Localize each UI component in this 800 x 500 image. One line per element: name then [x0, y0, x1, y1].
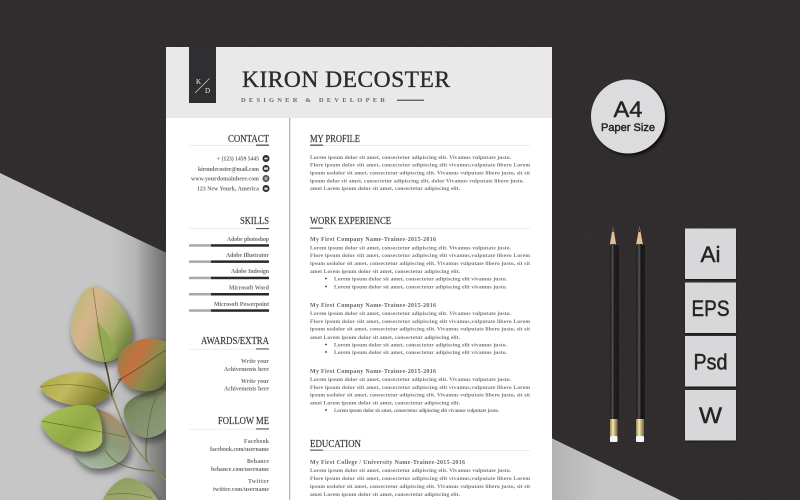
- section: skills: Microsoft Powerpoint: [214, 302, 269, 308]
- section: follow me: Facebook: [244, 439, 270, 445]
- section: my profile: ipsum usdolor sit amet, consectetur adipiscing elit. Vivamus vulputate libero justo, sit sit: [310, 170, 530, 176]
- section: contact: CONTACT: [228, 134, 269, 145]
- section: my profile: MY PROFILE: [310, 134, 360, 145]
- badge: Psd: Psd: [694, 350, 728, 374]
- job entry 3: ipsum usdolor sit amet, consectetur adipiscing elit. Vivamus vulputate libero justo, sit sit: [310, 392, 530, 398]
- job entry 2: Lorem ipsum dolor sit amet, consectetur adipiscing elit vivamus justo.: [334, 350, 508, 356]
- light gray diagonal background: [0, 173, 680, 500]
- job entry 3: amet Lorem ipsum dolor sit amet, consectetur adipiscing elit.: [310, 400, 461, 406]
- leaf A: [71, 286, 132, 362]
- section: education: [310, 439, 530, 498]
- job entry 3: Lorem ipsum dolor sit amet, consectetur adipiscing elit. Vivamus vulputate justo.: [310, 377, 512, 383]
- section: skills: Microsoft Word: [229, 286, 270, 292]
- resume paper: [166, 47, 552, 500]
- section: skills: Adobe photoshop: [227, 237, 269, 243]
- section: my profile: amet Lorem ipsum dolor sit amet, consectetur adipiscing elit.: [310, 186, 461, 192]
- job entry 3: Lorem ipsum dolor sit amet, consectetur adipiscing elit vivamus vulputate justo.: [334, 409, 500, 414]
- job entry 2: ipsum usdolor sit amet, consectetur adipiscing elit. Vivamus vulputate libero justo, sit sit: [310, 326, 530, 332]
- section: awards: Write your: [241, 359, 269, 365]
- section: follow me: behance.com/username: [211, 467, 269, 473]
- section: follow me: Twitter: [248, 479, 269, 485]
- botanical leaves: [40, 286, 166, 500]
- job entry 2: Flore ipsum dolor siit amet, consectetur adipiscing elit vivamus,vulputate libero Lorem: [310, 319, 530, 325]
- section: awards: [189, 336, 270, 392]
- job entry 1: amet Lorem ipsum dolor sit amet, consectetur adipiscing elit.: [310, 269, 461, 275]
- section: education: amet Lorem ipsum dolor sit amet, consectetur adipiscing elit.: [310, 492, 461, 498]
- section: contact: kirondecoster@mail.com: [198, 167, 259, 173]
- leaf B: [118, 339, 166, 391]
- job entry 3: My First Company Name-Trainee-2015-2016: [310, 369, 436, 375]
- leaf A centre patch: [97, 322, 117, 361]
- badge: A4 paper size: Paper Size: [601, 122, 655, 134]
- job entry 2: Lorem ipsum dolor sit amet, consectetur adipiscing elit vivamus justo.: [334, 342, 508, 348]
- leaf E: [41, 405, 102, 452]
- job subtitle: DESIGNER & DEVELOPER: [241, 97, 385, 104]
- badge: EPS: EPS: [692, 296, 730, 321]
- job entry 2: Lorem ipsum dolor sit amet, consectetur adipiscing elit. Vivamus vulputate justo.: [310, 311, 512, 317]
- job entry 2: [310, 303, 530, 356]
- pencil 2: [636, 226, 645, 442]
- badge: A4 paper size: A4: [614, 97, 642, 122]
- leaf stems: [105, 362, 166, 480]
- leaf C: [40, 372, 110, 407]
- header band: [166, 47, 552, 118]
- badge: A4 paper size: [591, 80, 665, 154]
- section: education: My First College / University Name-Trainee-2015-2016: [310, 460, 465, 466]
- section: contact: 123 New Yourk, America: [197, 186, 259, 192]
- job entry 2: My First Company Name-Trainee-2015-2016: [310, 303, 436, 309]
- section: education: Lorem ipsum dolor sit amet, consectetur adipiscing elit. Vivamus vulputate justo.: [310, 468, 512, 474]
- monogram tab: [189, 47, 216, 103]
- column divider: [289, 118, 290, 500]
- job entry 3: [310, 369, 530, 414]
- job entry 1: [310, 237, 530, 290]
- badge: Psd: [685, 336, 736, 386]
- section: follow me: facebook.com/username: [210, 447, 269, 453]
- badge: Ai: [685, 228, 736, 279]
- badge: W: W: [699, 403, 722, 428]
- job entry 1: Lorem ipsum dolor sit amet, consectetur adipiscing elit vivamus justo.: [334, 284, 508, 290]
- section: work experience: WORK EXPERIENCE: [310, 216, 391, 227]
- section: my profile: ipsum dolor sit amet, consectetur adipiscing elit, dolor Vivamus vulputate libero justo.: [310, 178, 525, 184]
- job entry 1: Flore ipsum dolor siit amet, consectetur adipiscing elit vivamus,vulputate libero Lorem: [310, 253, 530, 259]
- section: my profile: Flore ipsum dolor siit amet, consectetur adipiscing elit vivamus,vulputate libero Lorem: [310, 162, 530, 168]
- section: my profile: Lorem ipsum dolor sit amet, consectetur adipiscing elit. Vivamus vulputate justo.: [310, 155, 512, 161]
- section: education: Flore ipsum dolor siit amet, consectetur adipiscing elit vivamus,vulputate libero Lorem: [310, 476, 530, 482]
- contact icons: [262, 155, 270, 192]
- section: contact: www.yourdomainhere.com: [191, 176, 259, 182]
- section: awards: Achivements here: [224, 367, 269, 373]
- job entry 1: ipsum usdolor sit amet, consectetur adipiscing elit. Vivamus vulputate libero justo, sit sit: [310, 261, 530, 267]
- section: work experience: [310, 216, 530, 414]
- monogram tab: K: [196, 78, 201, 86]
- section: awards: AWARDS/EXTRA: [201, 336, 270, 347]
- section: contact: [189, 134, 270, 192]
- job entry 2: amet Lorem ipsum dolor sit amet, consectetur adipiscing elit.: [310, 335, 461, 341]
- monogram tab: D: [205, 87, 210, 95]
- leaf G: [103, 478, 158, 500]
- job entry 3: Flore ipsum dolor siit amet, consectetur adipiscing elit vivamus,vulputate libero Lorem: [310, 385, 530, 391]
- section: follow me: twitter.com/username: [213, 487, 269, 493]
- section: awards: Write your: [241, 379, 269, 385]
- section: follow me: Behance: [247, 459, 269, 465]
- leaf F: [73, 409, 129, 469]
- badge: EPS: [685, 282, 736, 333]
- section: follow me: FOLLOW ME: [218, 416, 269, 427]
- badge: Ai: Ai: [700, 242, 720, 267]
- pencil 1: [610, 226, 619, 442]
- job entry 1: Lorem ipsum dolor sit amet, consectetur adipiscing elit vivamus justo.: [334, 276, 508, 282]
- section: follow me: [189, 416, 270, 493]
- leaf veins: [40, 288, 166, 498]
- section: skills: Adobe Illustrator: [226, 253, 269, 259]
- section: skills: Adobe Indesign: [231, 269, 270, 275]
- job entry 1: My First Company Name-Trainee-2015-2016: [310, 237, 436, 243]
- section: my profile: [310, 134, 530, 192]
- leaf D: [124, 390, 166, 438]
- section: education: ipsum usdolor sit amet, consectetur adipiscing elit. Vivamus vulputate libero justo, sit sit: [310, 484, 530, 490]
- section: contact: + (123) 1459 5445: [217, 156, 259, 162]
- job entry 1: Lorem ipsum dolor sit amet, consectetur adipiscing elit. Vivamus vulputate justo.: [310, 246, 512, 252]
- name heading: KIRON DECOSTER: [242, 67, 450, 93]
- section: education: EDUCATION: [310, 439, 361, 450]
- section: awards: Achivements here: [224, 386, 269, 392]
- section: skills: [189, 216, 270, 312]
- section: skills: SKILLS: [240, 216, 269, 227]
- badge: W: [685, 390, 736, 440]
